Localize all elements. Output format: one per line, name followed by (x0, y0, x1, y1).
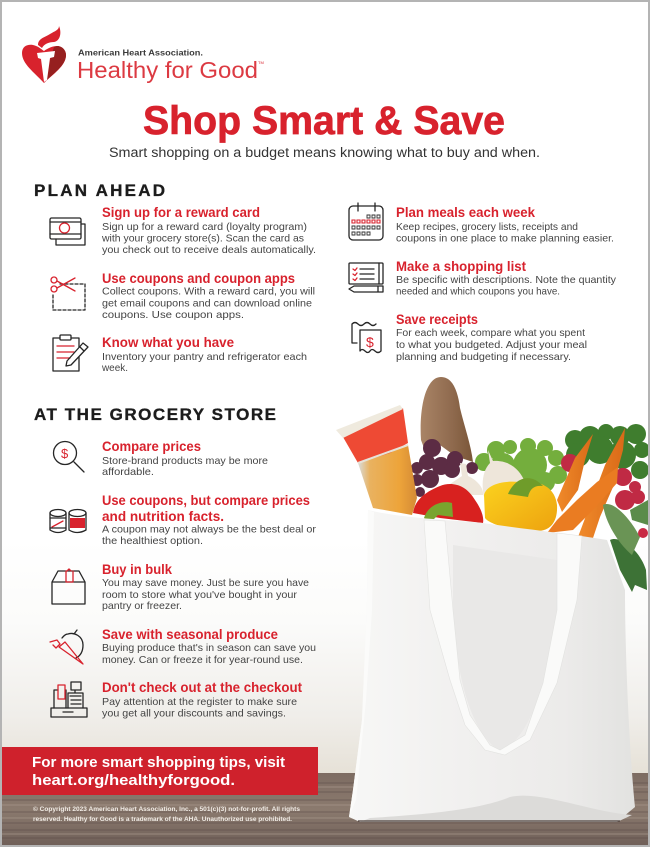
red pepper (413, 484, 483, 523)
bag base shading (360, 796, 632, 822)
tip: compare prices (54, 439, 268, 478)
garlic (450, 450, 525, 497)
tip: plan meals each week (349, 203, 614, 244)
background: wooden table (0, 773, 650, 846)
heading: Know what you have (102, 335, 234, 350)
body text: get email coupons and can download online (102, 298, 312, 310)
trademark: TM (258, 60, 264, 65)
icon: reward card (50, 218, 85, 245)
icon: cash register (51, 682, 87, 717)
icon: calendar (349, 203, 383, 240)
body text: Be specific with descriptions. Note the quantity (396, 275, 617, 286)
body text: money. Can or freeze it for year-round use. (102, 655, 303, 666)
background: wall fade (0, 540, 650, 774)
copyright text: © Copyright 2023 American Heart Association, Inc., a 501(c)(3) not-for-profit. All rights (33, 805, 300, 813)
lettuce (475, 438, 567, 492)
red pepper stem (424, 502, 453, 523)
icon: receipts: $ (366, 334, 374, 350)
tip: save receipts (352, 312, 587, 363)
body text: with your grocery store(s). Scan the card as (101, 234, 304, 244)
front strap (424, 520, 582, 755)
heading: Plan meals each week (396, 205, 535, 220)
heading: Use coupons, but compare prices (102, 493, 310, 508)
tip: save with seasonal produce (50, 627, 316, 666)
icon: list and pencil (349, 263, 383, 292)
logo text: American Heart Association: American Heart Association. (78, 48, 203, 58)
body text: you check out to receive deals automatically. (102, 245, 316, 256)
heading: plan ahead: PLAN AHEAD (34, 181, 165, 200)
bag body (349, 510, 635, 822)
icon: receipts (352, 322, 381, 352)
yellow pepper stem (508, 478, 543, 497)
body text: the healthiest option. (102, 536, 203, 547)
icon: cans (50, 510, 86, 532)
icon: magnifier with dollar: $ (61, 446, 69, 461)
logo text: Healthy for Good: Healthy for Good (77, 57, 258, 83)
tip: sign up for a reward card (50, 205, 316, 256)
heading: and nutrition facts. (102, 509, 224, 524)
bag base line (358, 820, 620, 822)
tip: buy in bulk (52, 562, 309, 612)
icon: magnifier with dollar (54, 442, 84, 472)
icon: apple and carrot (50, 630, 83, 664)
radishes (561, 454, 645, 510)
heading: Sign up for a reward card (102, 205, 260, 220)
heading: Save with seasonal produce (102, 627, 278, 642)
icon: clipboard and pen (53, 335, 88, 371)
body text: Buying produce that's in season can save you (102, 643, 316, 654)
leafy greens (603, 500, 648, 592)
body text: to what you budgeted. Adjust your meal (396, 340, 587, 351)
tip: know what you have (53, 335, 307, 374)
heading: Make a shopping list (396, 259, 526, 274)
body text: Store-brand products may be more (102, 456, 268, 467)
body text: For each week, compare what you spent (396, 328, 585, 339)
body text: coupons. Use coupon apps. (102, 310, 244, 321)
tip: make a shopping list (349, 259, 617, 298)
body text: planning and budgeting if necessary. (396, 352, 571, 363)
tip: don't check out at the checkout (51, 680, 302, 720)
body text: week. (101, 363, 128, 374)
banner text: heart.org/healthyforgood. (32, 772, 235, 789)
pasta package (336, 405, 417, 515)
icon: scissors and coupon (51, 277, 85, 310)
callout banner (2, 747, 318, 795)
heading: Save receipts (396, 312, 478, 327)
body text: A coupon may not always be the best deal or (102, 524, 317, 536)
icon: heart and torch (22, 26, 66, 83)
icon: box (52, 569, 85, 604)
body text: room to store what you've bought in your (102, 590, 298, 601)
bag interior shading (453, 545, 557, 752)
body text: You may save money. Just be sure you have (102, 578, 309, 589)
bread (421, 377, 473, 462)
logo: American Heart Association Healthy for Good (22, 26, 264, 83)
heading: Buy in bulk (102, 562, 172, 577)
grapes (411, 439, 478, 497)
body text: pantry or freezer. (102, 601, 182, 612)
heading: at the grocery store: AT THE GROCERY STORE (34, 405, 276, 424)
tip: use coupons, but compare (50, 493, 317, 547)
body text: affordable. (102, 467, 154, 478)
heading: Use coupons and coupon apps (102, 271, 295, 286)
carrots (547, 428, 625, 538)
tip: use coupons and coupon apps (51, 271, 315, 321)
body text: Keep recipes, grocery lists, receipts and (396, 222, 578, 233)
body text: Pay attention at the register to make sure (102, 697, 297, 708)
body text: you get all your discounts and savings. (102, 708, 286, 720)
body text: coupons in one place to make planning easier. (396, 234, 614, 244)
copyright text: reserved. Healthy for Good is a trademark of the AHA. Unauthorized use prohibited. (33, 816, 292, 823)
body text: Sign up for a reward card (loyalty program) (102, 222, 307, 233)
body text: Inventory your pantry and refrigerator each (102, 352, 307, 363)
body text: Collect coupons. With a reward card, you will (102, 286, 315, 298)
bag left gusset (349, 510, 374, 817)
subtitle: Smart shopping on a budget means knowing what to buy and when. (109, 145, 540, 160)
illustration: grocery bag with food (336, 377, 650, 822)
heading: Don't check out at the checkout (102, 680, 302, 695)
body text: needed and which coupons you have. (396, 286, 560, 298)
heading: Compare prices (102, 439, 201, 454)
banner text: For more smart shopping tips, visit (32, 754, 285, 771)
title: Shop Smart & Save (143, 99, 505, 143)
kale (565, 424, 650, 479)
yellow pepper (484, 482, 557, 531)
